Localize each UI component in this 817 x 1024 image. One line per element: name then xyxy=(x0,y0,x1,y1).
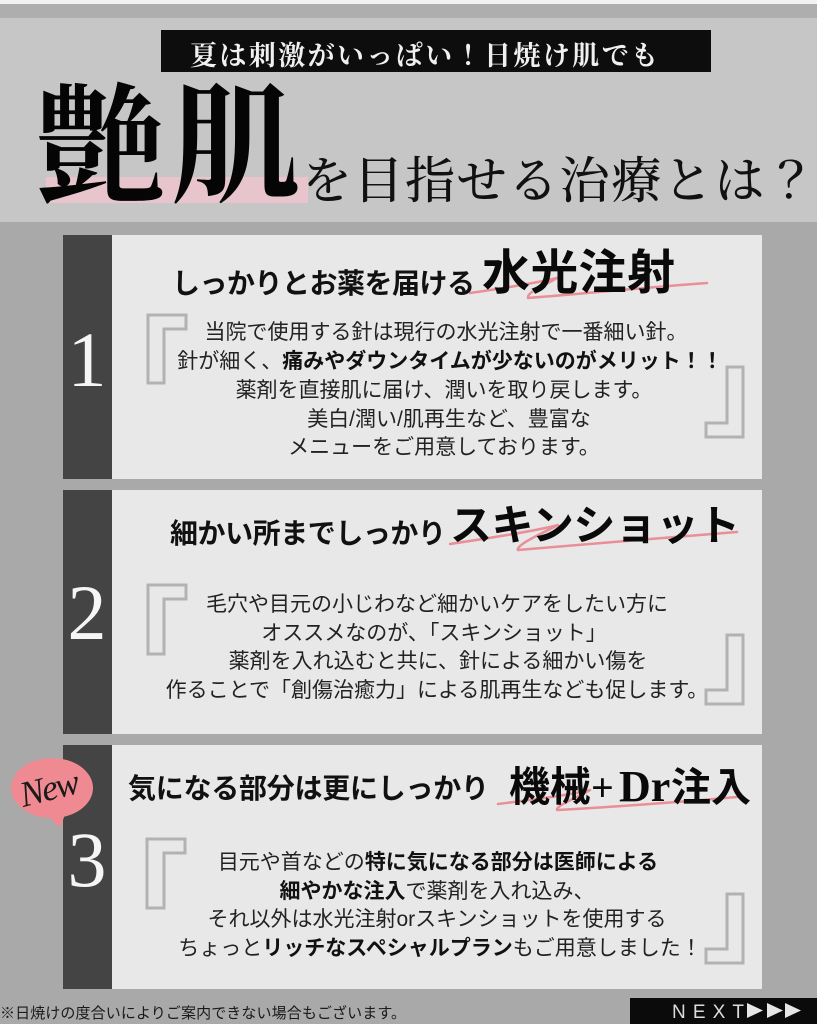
header band xyxy=(0,18,817,222)
footnote: ※日焼けの度合いによりご案内できない場合もございます。 xyxy=(0,1004,406,1022)
body text 3: 目元や首などの特に気になる部分は医師による xyxy=(218,851,658,874)
next button: NEXT xyxy=(672,1002,744,1023)
heading 3: 注入 xyxy=(671,766,751,810)
title: 艶肌 xyxy=(35,77,301,221)
heading 3 xyxy=(128,762,751,811)
number strip 2: 2 xyxy=(68,569,106,656)
subtitle bar: 夏は刺激がいっぱい！日焼け肌でも xyxy=(190,41,658,71)
new badge: New xyxy=(15,761,83,815)
number strip 2 xyxy=(63,490,112,734)
body text 1: 薬剤を直接肌に届け、潤いを取り戻します。 xyxy=(236,379,652,402)
body text 3: ちょっとリッチなスペシャルプランもご用意しました！ xyxy=(178,937,702,960)
heading 1: しっかりとお薬を届ける xyxy=(172,268,475,299)
body text 1: 当院で使用する針は現行の水光注射で一番細い針。 xyxy=(204,321,688,344)
body text 1: 美白/潤い/肌再生など、豊富な xyxy=(307,408,591,431)
heading 3: Dr xyxy=(619,762,670,811)
body text 2: 毛穴や目元の小じわなど細かいケアをしたい方に xyxy=(206,593,668,616)
body text 3 xyxy=(178,851,702,960)
heading 3: + xyxy=(591,765,614,810)
number strip 3 xyxy=(63,745,112,989)
heading 2 xyxy=(170,502,740,550)
panel 3 xyxy=(63,745,762,989)
quote brackets 2 xyxy=(148,585,743,704)
heading 3: 気になる部分は更にしっかり xyxy=(128,773,489,804)
number strip 1: 1 xyxy=(68,316,106,403)
number strip 3: 3 xyxy=(68,816,106,903)
body text 3: 細やかな注入で薬剤を入れ込み、 xyxy=(280,880,594,903)
body text 1: メニューをご用意しております。 xyxy=(288,436,600,459)
heading 1: 水光注射 xyxy=(482,247,675,300)
body text 2: オススメなのが、「スキンショット」 xyxy=(261,622,607,645)
body text 1 xyxy=(177,321,723,459)
body text 2 xyxy=(166,593,708,702)
subtitle bar xyxy=(161,30,711,72)
heading 2: 細かい所までしっかり xyxy=(170,518,446,549)
quote brackets 3 xyxy=(147,839,743,963)
next button xyxy=(630,998,817,1024)
quote brackets 1 xyxy=(148,315,743,437)
heading 3: 機械 xyxy=(509,764,591,810)
heading 1 xyxy=(172,247,707,300)
body text 1: 針が細く、痛みやダウンタイムが少ないのがメリット！！ xyxy=(177,349,723,373)
panel 1 xyxy=(63,235,762,479)
heading 2: スキンショット xyxy=(450,502,740,549)
title xyxy=(35,77,816,221)
icon: next arrows xyxy=(747,1003,801,1018)
number strip 1 xyxy=(63,235,112,479)
body text 2: 薬剤を入れ込むと共に、針による細かい傷を xyxy=(229,650,647,673)
title: を目指せる治療とは？ xyxy=(302,153,816,209)
body text 3: それ以外は水光注射orスキンショットを使用する xyxy=(207,908,667,931)
panel 2 xyxy=(63,490,762,734)
body text 2: 作ることで「創傷治癒力」による肌再生なども促します。 xyxy=(166,679,708,702)
new badge xyxy=(11,758,93,828)
